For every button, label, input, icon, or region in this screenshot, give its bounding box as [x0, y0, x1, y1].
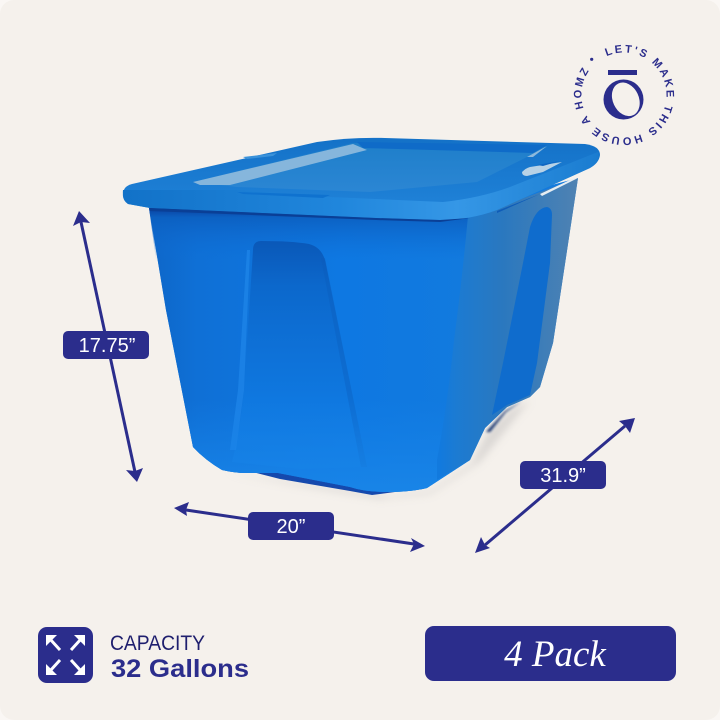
product photo: blue storage tote: [123, 138, 600, 499]
pack count badge: 4 Pack: [504, 634, 606, 675]
dimension: width 20": [174, 502, 425, 552]
dimension: height 17.75": [63, 211, 149, 482]
tote silhouette base: [149, 178, 578, 492]
lid rim band: [123, 152, 599, 220]
arrow: width: [186, 510, 414, 544]
label: 17.75": 17.75”: [79, 335, 135, 357]
lid centre panel: [193, 143, 547, 192]
lid handle marks: [522, 162, 562, 176]
capacity icon: [38, 627, 93, 683]
label: 20": [248, 512, 334, 540]
lid inner ridge: [357, 142, 547, 153]
tote side wall: [437, 178, 578, 480]
capacity text: CAPACITY: [110, 632, 205, 655]
circular slogan: LET'S MAKE THIS HOUSE A HOMZ: [574, 44, 674, 146]
tote lid: [123, 138, 600, 220]
lid lower edge shadow: [150, 208, 470, 222]
label: 20": 20”: [277, 516, 305, 538]
brand badge: [574, 44, 674, 146]
side handle recess: [492, 207, 552, 415]
label: 17.75": [63, 331, 149, 359]
slogan dot: [590, 58, 593, 61]
arrow: height: [81, 222, 135, 472]
logo mark: [604, 70, 645, 121]
pack count badge: [425, 626, 676, 681]
capacity text: [110, 632, 249, 683]
floor shadow: [225, 400, 530, 499]
lid light reflection strip: [193, 144, 367, 185]
tote feet: [245, 470, 395, 495]
front handle recess: [232, 241, 367, 469]
tote body shading: [149, 208, 490, 492]
label: 31.9": [520, 461, 606, 489]
label: 31.9": 31.9”: [540, 465, 586, 487]
arrow: depth: [485, 426, 625, 545]
dimension: depth 31.9": [475, 418, 635, 553]
capacity text: 32 Gallons: [111, 655, 249, 683]
